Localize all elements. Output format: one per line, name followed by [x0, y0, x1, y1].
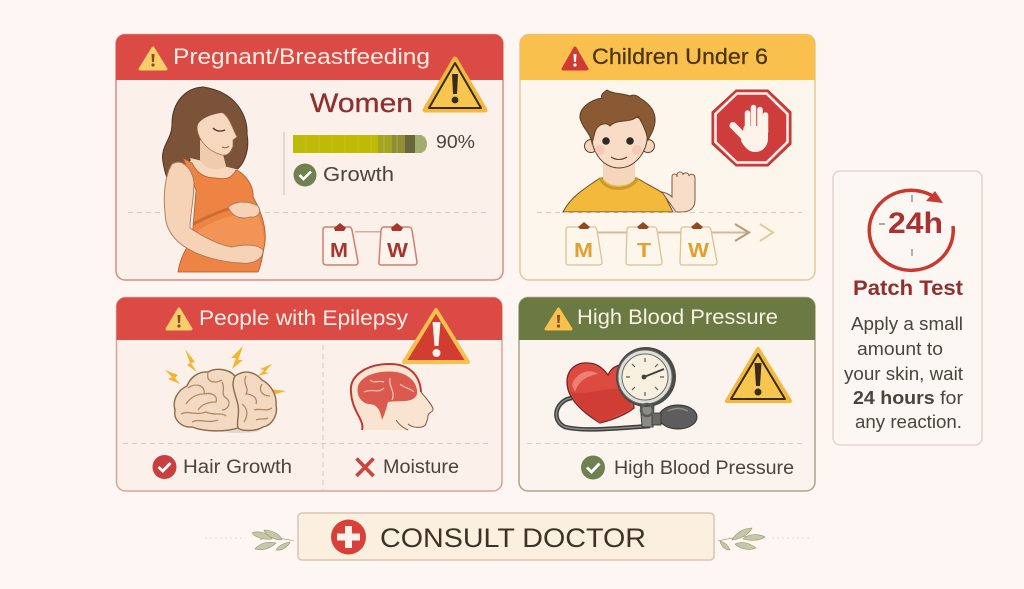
icon: large warning triangle	[425, 59, 485, 110]
timeline: M and W clipboards: M	[330, 240, 348, 262]
banner: consult doctor	[205, 513, 810, 560]
text block: instructions	[844, 314, 963, 432]
vertical divider	[284, 132, 285, 195]
panel body	[519, 298, 815, 491]
icon: right leaf sprig	[718, 528, 765, 550]
icon: small warning triangle	[546, 309, 571, 329]
panel: pregnant or breastfeeding women	[116, 34, 503, 280]
value: 90%: 90%	[436, 132, 475, 152]
icon: stop sign with hand	[712, 90, 791, 166]
text block: instructions: amount to	[857, 339, 943, 359]
panel body	[520, 34, 815, 280]
icon: 24h timer: 24h	[888, 207, 943, 240]
panel header bar	[116, 298, 502, 340]
timeline: M and W clipboards	[323, 223, 417, 265]
text block: instructions: your skin, wait	[844, 364, 963, 384]
label: consult doctor: CONSULT DOCTOR	[380, 523, 646, 553]
panel: people with epilepsy	[116, 298, 502, 491]
text block: instructions: any reaction.	[855, 412, 962, 432]
icon: red cross	[356, 458, 374, 476]
icon: red cross circle	[331, 520, 366, 554]
icon: 24h timer	[869, 190, 953, 270]
button body	[298, 513, 714, 560]
timeline: M T W clipboards with arrow: M	[574, 240, 593, 262]
heading: people with epilepsy: People with Epilepsy	[199, 307, 409, 330]
progress bar 90%	[293, 135, 427, 153]
icon: left leaf sprig	[252, 530, 294, 550]
panel: children under 6	[520, 34, 815, 280]
timeline: M and W clipboards: W	[387, 240, 408, 262]
icon: green check	[581, 456, 605, 480]
icon: large red warning triangle	[404, 310, 468, 362]
icon: small warning triangle	[140, 48, 166, 69]
icon: red warning triangle	[563, 48, 587, 69]
illustration: brain with lightning bolts	[165, 346, 286, 433]
illustration: heart and blood pressure gauge	[556, 347, 697, 429]
heading: pregnant or breastfeeding: Pregnant/Breastfeeding	[173, 44, 430, 69]
icon: small warning triangle	[167, 309, 191, 329]
label: growth: Growth	[323, 164, 394, 186]
text block: instructions: Apply a small	[851, 314, 963, 334]
icon: warning triangle	[727, 349, 790, 401]
icon: red check	[152, 455, 176, 479]
timeline: M T W clipboards with arrow: W	[688, 240, 709, 262]
panel: high blood pressure	[519, 298, 815, 491]
illustration: pregnant woman	[163, 87, 265, 272]
heading: patch test: Patch Test	[853, 277, 963, 300]
panel card	[833, 171, 982, 445]
panel body	[116, 298, 502, 491]
text block: instructions: 24 hours for	[853, 388, 963, 408]
label: moisture: Moisture	[383, 457, 459, 478]
timeline: M T W clipboards with arrow: T	[637, 240, 651, 262]
panel body	[116, 34, 503, 280]
label: hair growth: Hair Growth	[183, 457, 292, 478]
timeline: M T W clipboards with arrow	[566, 222, 773, 265]
illustration: boy raising hand	[563, 90, 695, 212]
icon: green check	[294, 164, 316, 186]
panel header bar	[520, 34, 815, 80]
panel: patch test	[833, 171, 982, 445]
heading: high blood pressure: High Blood Pressure	[577, 306, 778, 329]
heading: children under 6: Children Under 6	[592, 44, 768, 69]
label: women: Women	[310, 88, 413, 118]
panel header bar	[116, 34, 503, 80]
illustration: head profile with brain	[351, 364, 433, 430]
panel header bar	[519, 298, 815, 340]
label: high blood pressure: High Blood Pressure	[614, 458, 794, 479]
